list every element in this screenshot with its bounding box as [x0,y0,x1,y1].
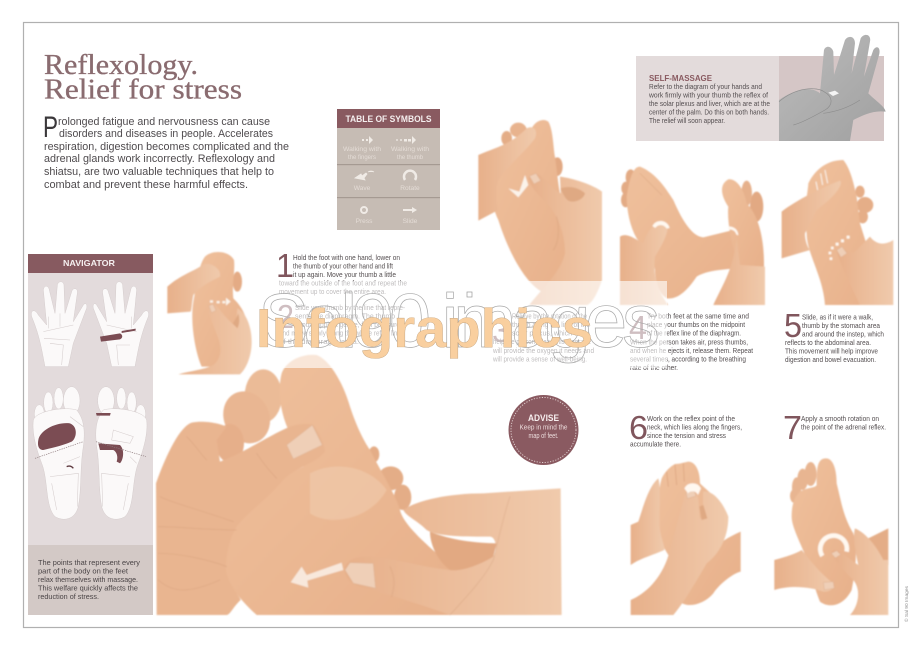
step 3 text: help the person relax. This massage [493,337,591,346]
panel: navigator: NAVIGATOR [63,258,115,268]
photo: step 5 foot [782,160,893,305]
watermark: Infographics [256,297,593,359]
panel: self-massage: SELF-MASSAGE [649,73,712,83]
step 3 text: will provide the oxygen it needs and [492,346,594,355]
navigator caption: relax themselves with massage. [38,575,138,584]
diagram: left foot [33,387,84,519]
panel: navigator [28,254,153,615]
intro text block: adrenal glands work incorrectly. Reflexology and [44,153,275,165]
intro text block [43,111,289,191]
panel: table of symbols: the fingers [348,154,377,161]
icon: walking with the thumb [396,136,416,144]
step 2 text: Slide your thumb by the line that repre- [295,303,406,312]
icon: walking with the fingers [362,136,373,144]
callout: advise: Keep in mind the [520,424,568,432]
step 5 text [784,307,884,364]
panel: self-massage: Refer to the diagram of your hands and [649,82,762,91]
step 2 text [277,298,406,346]
photo: step 6 foot [631,462,741,615]
step 6 text: since the tension and stress [647,431,726,440]
panel: table of symbols: Press [356,218,373,225]
panel: table of symbols [337,109,440,230]
step 4 text: Try both feet at the same time and [647,312,749,320]
step 7 text: the point of the adrenal reflex. [801,422,886,432]
step 3 text: will provide a sense of well-being. [492,354,587,364]
step 3 text: 3 [492,312,510,349]
step 5 text: 5 [784,307,802,344]
step 3 text: thumb along the line of the [512,320,590,329]
step 5 text: digestion and bowel evacuation. [785,355,876,364]
panel: self-massage: center of the palm. Do this on both hands. [649,108,769,116]
photo: step 7 foot [774,458,888,615]
intro text block: P [43,111,58,144]
icon: rotate [404,171,416,180]
step 6 text: neck, which lies along the fingers, [647,422,742,432]
icon: press [361,207,367,213]
step 5 text: and around the instep, which [802,330,884,338]
step 1 text: 1 [276,247,294,284]
photo: step 4 both feet [620,167,765,305]
step 5 text: Slide, as if it were a walk, [802,312,873,322]
step 4 text: 4 [629,309,647,346]
step 3 text: solar plexus, which will [512,328,584,338]
step 5 text: thumb by the stomach area [802,321,880,330]
title: Reflexology. [44,49,198,81]
diagram: right foot [96,387,147,519]
step 1 text [276,247,407,296]
title: Relief for stress [44,74,242,106]
callout: advise: map of feet. [528,433,559,440]
diagram: left hand [31,282,87,367]
step 5 text: This movement will help improve [785,346,878,356]
step 2 text: should apply a gentle, firm pressure [295,320,400,329]
step 4 text: several times, according to the breathing [630,354,746,364]
diagram: right hand [93,282,149,367]
step 2 text: of the diaphragm area. [279,337,359,346]
step 3 text: Relieve by the rotation of the [512,312,587,320]
step 4 text [629,309,753,372]
step 6 text: accumulate there. [630,440,681,448]
step 7 text: 7 [783,409,802,446]
step 2 text: 2 [277,298,294,335]
photo: step 1 foot and hands [167,252,252,374]
step 4 text: When the person takes air, press thumbs, [630,338,748,346]
step 7 text [783,409,886,446]
step 4 text: and when he ejects it, release them. Repeat [630,346,753,355]
navigator caption: The points that represent every [38,558,140,567]
navigator caption [38,558,140,601]
panel: self-massage: The relief will soon appear. [649,116,725,125]
navigator caption: This welfare quickly affects the [38,584,138,592]
step 6 text: 6 [629,409,648,446]
step 6 text [629,409,742,448]
panel: self-massage [636,35,886,141]
panel: table of symbols: TABLE OF SYMBOLS [346,114,432,124]
callout: advise [508,395,578,465]
intro text block: rolonged fatigue and nervousness can cause [58,116,270,128]
panel: table of symbols: Wave [354,185,371,192]
step 1 text: Hold the foot with one hand, lower on [293,253,400,262]
photo: main foot with hands [156,355,562,615]
title [44,49,242,106]
panel: self-massage: the solar plexus and liver, which are at the [649,99,770,108]
panel: table of symbols: Walking with [391,146,429,153]
step 2 text: sents the diaphragm. The thumb [295,312,395,320]
step 2 text: and move slowly along the whole reflex line [279,328,401,338]
intro text block: combat and prevent these harmful effects. [44,179,248,191]
step 4 text: of the reflex line of the diaphragm. [647,328,741,338]
step 1 text: movement up to cover the entire area. [279,287,386,296]
icon: wave [355,171,374,180]
intro text block: shiatsu, are two valuable techniques that help to [44,166,274,178]
step 6 text: Work on the reflex point of the [647,414,735,423]
intro text block: disorders and diseases in people. Accelerates [59,128,273,140]
watermark: Sal90 images [258,279,660,364]
step 1 text: the thumb of your other hand and lift [293,262,393,270]
callout: advise: ADVISE [528,413,559,423]
panel: table of symbols: the thumb [397,154,423,161]
panel: table of symbols: Walking with [343,146,381,153]
icon: slide [403,207,417,213]
photo: step 2 foot with arrow [478,120,602,305]
panel: table of symbols: Rotate [400,185,420,192]
panel: table of symbols: Slide [403,218,418,225]
step 5 text: reflects to the abdominal area. [785,338,871,347]
intro text block: respiration, digestion becomes complicated and the [44,141,289,153]
step 4 text: place your thumbs on the midpoint [647,320,745,329]
navigator caption: reduction of stress. [38,592,99,601]
navigator caption: part of the body on the feet [38,566,128,576]
step 1 text: it up again. Move your thumb a little [293,270,396,279]
step 4 text: rate of the other. [630,363,678,372]
step 3 text [492,312,594,364]
copyright note: © Sal 90 Images [903,585,910,622]
step 1 text: toward the outside of the foot and repeat the [279,278,407,288]
step 7 text: Apply a smooth rotation on [801,414,879,423]
icon: hand photograph [779,35,886,141]
panel: self-massage: work firmly with your thumb the reflex of [648,90,768,100]
